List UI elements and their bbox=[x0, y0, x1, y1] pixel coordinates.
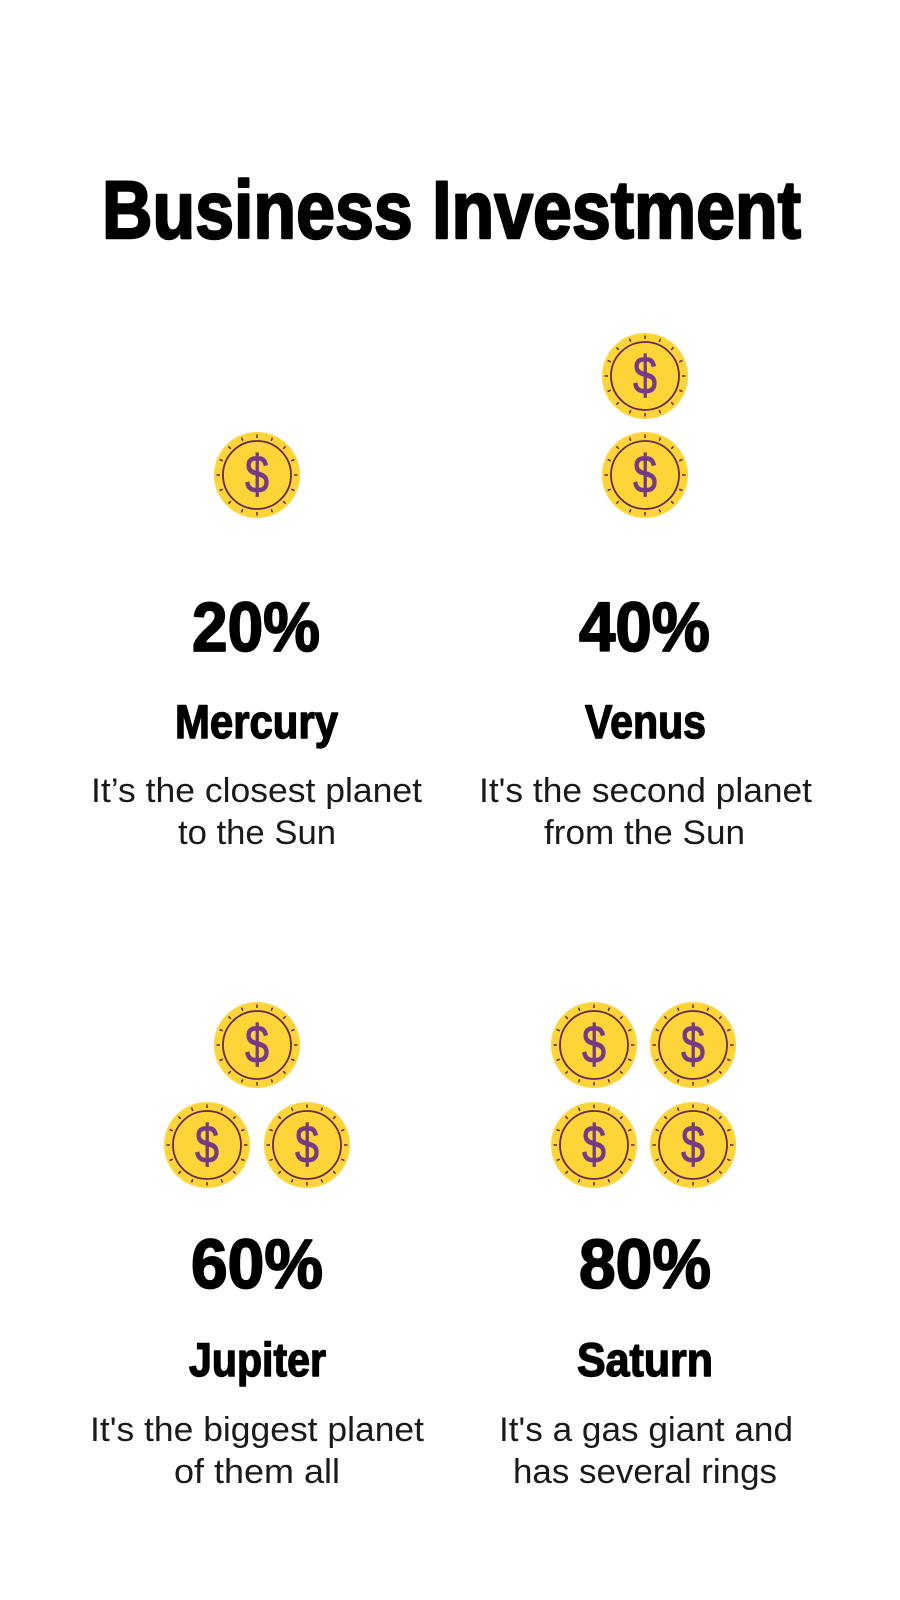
description: It's the biggest planet bbox=[90, 1411, 425, 1449]
description: of them all bbox=[174, 1453, 340, 1491]
panel: Jupiter bbox=[90, 1002, 425, 1491]
icon: coin stack: $ bbox=[681, 1116, 705, 1175]
description: from the Sun bbox=[544, 814, 745, 852]
icon: coin stack: $ bbox=[633, 347, 657, 406]
icon: coin stack: $ bbox=[681, 1016, 705, 1075]
icon: coin stack: $ bbox=[582, 1016, 606, 1075]
title: Business Investment bbox=[102, 165, 801, 256]
description: has several rings bbox=[513, 1453, 777, 1491]
heading: Mercury: Mercury bbox=[175, 695, 338, 748]
icon: coin stack bbox=[551, 1002, 736, 1188]
panel: Venus bbox=[479, 333, 813, 852]
percentage: 80%: 80% bbox=[579, 1225, 711, 1303]
heading: Venus: Venus bbox=[585, 695, 706, 748]
icon: coin stack: $ bbox=[195, 1116, 219, 1175]
heading: Jupiter: Jupiter bbox=[189, 1333, 326, 1386]
description: to the Sun bbox=[178, 814, 336, 852]
icon: coin stack bbox=[164, 1002, 350, 1188]
percentage: 60%: 60% bbox=[191, 1225, 323, 1303]
icon: coin stack bbox=[602, 333, 688, 518]
percentage: 20%: 20% bbox=[192, 588, 320, 666]
description: It's the second planet bbox=[479, 772, 813, 810]
icon: coin stack: $ bbox=[295, 1116, 319, 1175]
panel: Mercury bbox=[91, 432, 423, 852]
heading: Saturn: Saturn bbox=[577, 1333, 713, 1386]
description: It's a gas giant and bbox=[499, 1411, 793, 1449]
panel: Saturn bbox=[499, 1002, 793, 1491]
icon: coin stack: $ bbox=[245, 1016, 269, 1075]
icon: coin stack: $ bbox=[582, 1116, 606, 1175]
icon: coin: $ bbox=[245, 446, 269, 505]
description: It’s the closest planet bbox=[91, 772, 423, 810]
percentage: 40%: 40% bbox=[579, 588, 710, 666]
icon: coin stack: $ bbox=[633, 446, 657, 505]
icon: coin bbox=[214, 432, 300, 518]
